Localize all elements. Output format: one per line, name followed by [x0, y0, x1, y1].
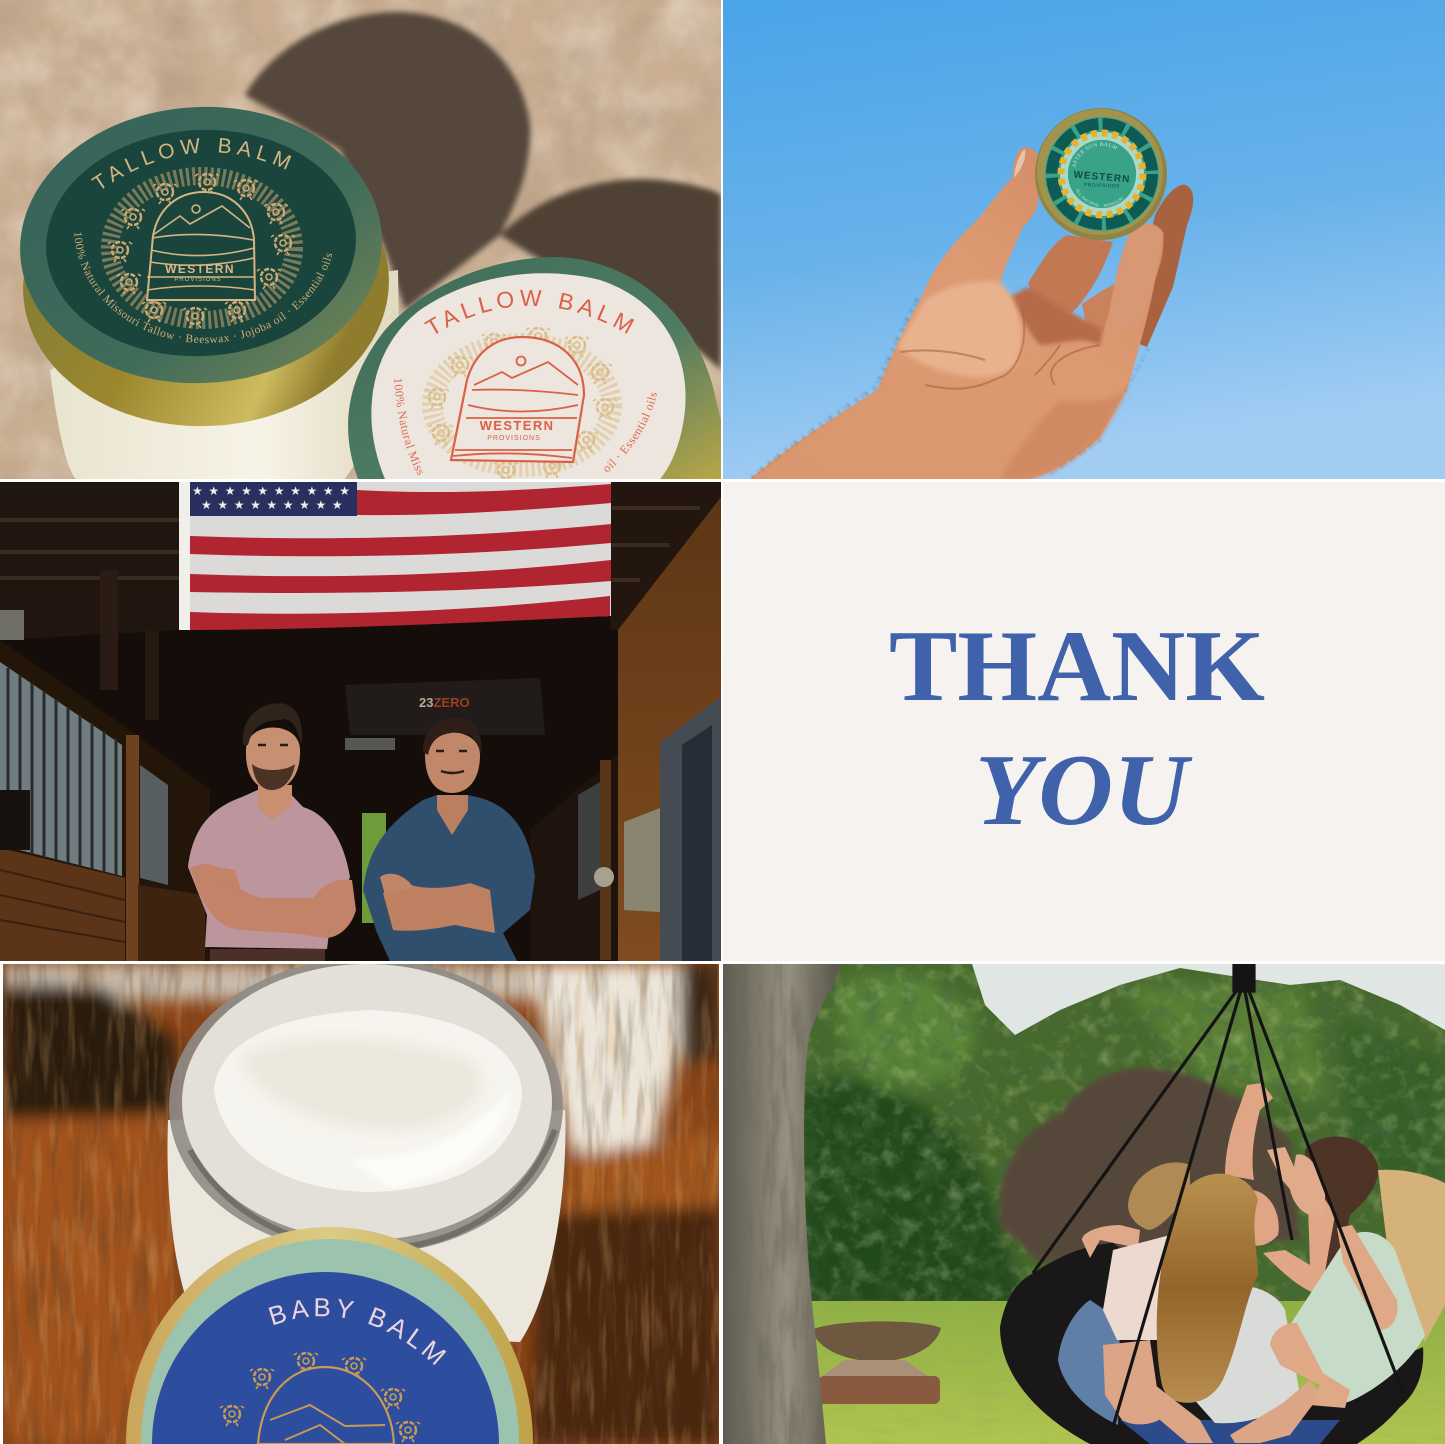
icon: after sun tin: PROVISIONS [1084, 182, 1120, 190]
jar: dark tallow balm: PROVISIONS [174, 277, 222, 283]
jar: dark tallow balm [20, 106, 399, 479]
brand: orange western provisions: WESTERN [480, 418, 554, 433]
emblem: floral arch [108, 174, 295, 328]
heading: you: YOU [975, 734, 1193, 847]
brand: western provisions: WESTERN [165, 262, 235, 276]
label text: cream tallow balm: TALLOW BALM [424, 290, 634, 334]
jar with cream [167, 958, 565, 1342]
ingredient line: 100% Natural Missouri Tallow · Beeswax · Jojoba oil · Essential oils [74, 232, 332, 344]
icon: after sun tin [1035, 108, 1167, 240]
banner with 23 zero sign [345, 678, 545, 750]
child center with long hair [1155, 1083, 1340, 1443]
icon: after sun tin: ALL NATURAL · MISSOURI [1076, 190, 1124, 207]
lawn [810, 1301, 1445, 1444]
man right in blue shirt [363, 717, 535, 961]
jar: cream tallow balm: oil · Essential oils [604, 392, 657, 472]
label text: baby balm: BABY BALM [268, 1298, 446, 1365]
flag canton [190, 482, 357, 516]
panel: baby balm jar on fur [3, 964, 719, 1444]
icon: hand [750, 147, 1193, 479]
label text: tallow balm: TALLOW BALM [91, 138, 292, 189]
child right in green dress [1267, 1136, 1425, 1408]
jar: cream tallow balm: PROVISIONS [487, 435, 541, 442]
heading: thank: THANK [889, 610, 1265, 723]
american flag: ★★★★★★★★★★ [192, 484, 356, 498]
american flag: ★★★★★★★★★ [201, 498, 348, 512]
jar: cream tallow balm [348, 257, 721, 479]
man left in plaid shirt [188, 703, 356, 961]
banner with 23 zero sign: 23ZERO [419, 695, 470, 710]
barn ceiling [0, 482, 721, 720]
emblem: orange arch [425, 328, 617, 482]
fur patches [3, 964, 719, 1444]
copper beech tree [999, 1068, 1300, 1262]
american flag [179, 482, 611, 630]
right wall and door [618, 497, 721, 961]
fire pit [812, 1321, 941, 1404]
doorway light [362, 813, 386, 923]
panel: children on tree swing [723, 964, 1445, 1444]
swing ropes [1033, 965, 1403, 1427]
panel: founders under flag in barn [0, 482, 721, 961]
shadow shapes on the rock [245, 12, 721, 370]
baby balm lid [126, 1227, 533, 1444]
brand: after sun tin label: WESTERN [1073, 170, 1131, 185]
boulder behind swing [1378, 1170, 1445, 1342]
left stalls [0, 610, 210, 961]
panel: tallow balm jars on rock [0, 0, 721, 479]
right stalls [530, 755, 618, 961]
swing seat [1000, 1243, 1423, 1444]
child left in floral dress [1082, 1162, 1190, 1424]
ingredient fragments: 100% Natural Missouri [394, 378, 423, 475]
icon: after sun tin: AFTER SUN BALM [1072, 142, 1118, 168]
panel: after sun balm tin held against sky [723, 0, 1445, 479]
panel: thank you message [723, 482, 1445, 961]
background trees [800, 964, 1445, 1310]
tree trunk [723, 964, 840, 1444]
emblem: gold flora arch [220, 1353, 420, 1444]
